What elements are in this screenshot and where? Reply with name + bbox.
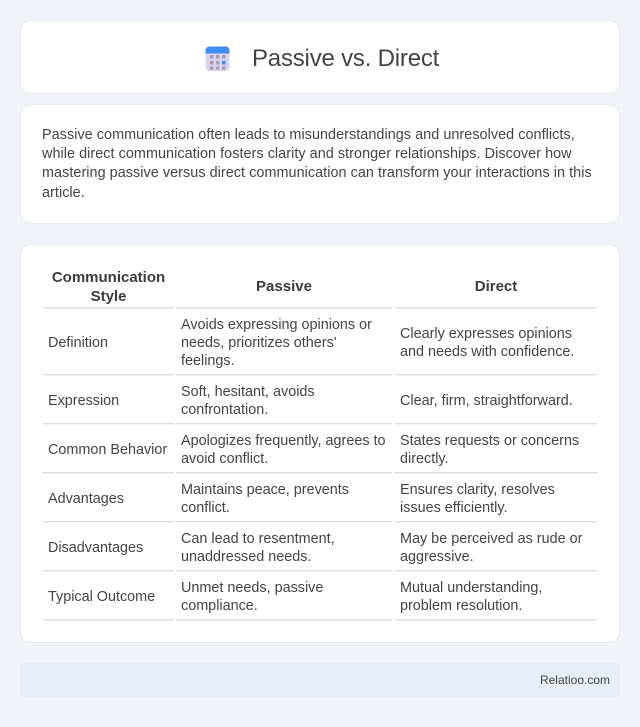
row: Expression: confrontation.	[181, 402, 268, 418]
table header row	[52, 269, 518, 305]
row: Advantages: Maintains peace, prevents	[181, 482, 349, 498]
row: Typical Outcome: Mutual understanding,	[400, 580, 542, 596]
row: Definition: feelings.	[181, 353, 235, 369]
row: Common Behavior: avoid conflict.	[181, 451, 268, 467]
table header row: Passive	[256, 278, 312, 295]
intro paragraph: while direct communication fosters clarity and stronger relationships. Discover how	[42, 146, 572, 162]
row: Typical Outcome: Typical Outcome	[48, 589, 155, 605]
row: Typical Outcome	[48, 580, 542, 614]
row: Advantages	[48, 482, 555, 516]
row: Typical Outcome: compliance.	[181, 598, 258, 614]
row: Disadvantages: Disadvantages	[48, 540, 143, 556]
panel: comparison table	[20, 244, 620, 643]
intro paragraph: article.	[42, 185, 85, 201]
intro paragraph	[42, 127, 592, 201]
row: Definition: Avoids expressing opinions or	[181, 317, 372, 333]
intro paragraph: Passive communication often leads to misunderstandings and unresolved conflicts,	[42, 127, 575, 143]
row: Disadvantages: Can lead to resentment,	[181, 531, 335, 547]
row: Expression	[48, 384, 573, 418]
table header row: Style	[91, 288, 126, 305]
panel: title card	[20, 20, 620, 94]
row: Common Behavior	[48, 433, 579, 467]
row: Expression: Clear, firm, straightforward.	[400, 393, 573, 409]
footer credit: Relatioo.com	[540, 673, 610, 687]
row: Advantages: Advantages	[48, 491, 124, 507]
table header row: Direct	[475, 278, 517, 295]
icon: calendar	[206, 46, 230, 71]
row: Typical Outcome: problem resolution.	[400, 598, 522, 614]
row: Common Behavior: directly.	[400, 451, 449, 467]
row: Disadvantages	[48, 531, 582, 565]
row: Common Behavior: Common Behavior	[48, 442, 167, 458]
row: Definition: Definition	[48, 335, 108, 351]
row dividers	[43, 307, 597, 621]
row: Common Behavior: States requests or concerns	[400, 433, 579, 449]
row: Definition: needs, prioritizes others'	[181, 335, 337, 351]
row: Common Behavior: Apologizes frequently, agrees to	[181, 433, 386, 449]
row: Typical Outcome: Unmet needs, passive	[181, 580, 323, 596]
footer bar	[20, 663, 620, 697]
row: Advantages: conflict.	[181, 500, 230, 516]
row: Disadvantages: May be perceived as rude or	[400, 531, 582, 547]
row: Disadvantages: unaddressed needs.	[181, 549, 311, 565]
row: Expression: Soft, hesitant, avoids	[181, 384, 315, 400]
title: Passive vs. Direct	[252, 45, 439, 72]
row: Definition: and needs with confidence.	[400, 344, 574, 360]
row: Expression: Expression	[48, 393, 119, 409]
table header row: Communication	[52, 269, 165, 286]
row: Advantages: Ensures clarity, resolves	[400, 482, 555, 498]
panel: intro text	[20, 104, 620, 224]
row: Definition	[48, 317, 574, 369]
row: Advantages: issues efficiently.	[400, 500, 507, 516]
row: Disadvantages: aggressive.	[400, 549, 474, 565]
intro paragraph: mastering passive versus direct communication can transform your interactions in this	[42, 165, 592, 181]
row: Definition: Clearly expresses opinions	[400, 326, 572, 342]
